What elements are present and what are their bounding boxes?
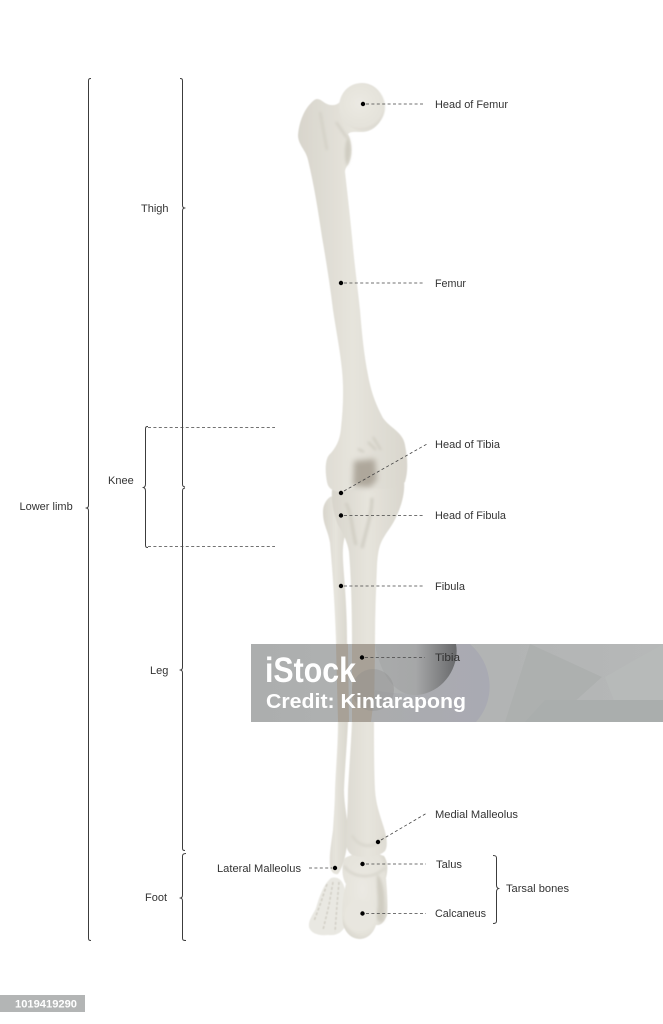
watermark shape: large purple circle bbox=[371, 644, 490, 722]
bracket: Foot bbox=[180, 854, 186, 940]
bracket: Lower limb bbox=[86, 78, 91, 940]
label: Lower limb: Lower limb bbox=[20, 501, 73, 513]
image number tag bbox=[0, 995, 85, 1012]
bone: femur bbox=[298, 83, 407, 492]
label: Leg: Leg bbox=[150, 665, 168, 677]
watermark credit: Credit: Kintarapong bbox=[266, 691, 466, 713]
callout: Talus bbox=[360, 859, 462, 871]
callout: Fibula bbox=[339, 581, 466, 593]
image number tag: 1019419290 bbox=[15, 998, 77, 1010]
callout: Tibia bbox=[360, 652, 461, 664]
watermark shape: dark circle bbox=[375, 644, 457, 695]
callout: Head of Fibula bbox=[339, 510, 507, 522]
callout: Head of Fibula: Head of Fibula bbox=[435, 510, 507, 522]
label: Knee: Knee bbox=[108, 475, 134, 487]
callout: Head of Femur bbox=[361, 99, 508, 111]
bone: talus and calcaneus bbox=[342, 853, 387, 939]
callout: Lateral Malleolus: Lateral Malleolus bbox=[217, 863, 302, 875]
watermark shape: triangles bbox=[505, 644, 602, 722]
label: Thigh: Thigh bbox=[141, 203, 169, 215]
bracket: Thigh bbox=[180, 78, 185, 487]
callout: Head of Tibia: Head of Tibia bbox=[435, 439, 501, 451]
bracket: Knee bbox=[144, 426, 275, 548]
watermark band bbox=[251, 644, 663, 722]
callout: Talus: Talus bbox=[436, 859, 462, 871]
bracket: Tarsal bones: Tarsal bones bbox=[506, 883, 569, 895]
bracket: Leg bbox=[180, 488, 185, 850]
callout: Calcaneus: Calcaneus bbox=[435, 908, 486, 920]
callout: Medial Malleolus: Medial Malleolus bbox=[435, 809, 518, 821]
callout: Lateral Malleolus bbox=[217, 863, 337, 875]
callout: Femur bbox=[339, 278, 466, 290]
label: Foot: Foot bbox=[145, 892, 167, 904]
callout: Femur: Femur bbox=[435, 278, 466, 290]
bone: tibia bbox=[332, 480, 404, 857]
callout: Fibula: Fibula bbox=[435, 581, 466, 593]
bone: fibula bbox=[323, 496, 348, 874]
knee notch shadow bbox=[353, 459, 377, 487]
callout: Head of Femur: Head of Femur bbox=[435, 99, 508, 111]
tibia and fibula seen through the watermark bbox=[336, 644, 375, 722]
bone: foot tarsals lacy bbox=[309, 878, 346, 935]
bracket: Tarsal bones bbox=[493, 856, 569, 924]
callout: Calcaneus bbox=[360, 908, 486, 920]
callout: Tibia: Tibia bbox=[435, 652, 461, 664]
watermark wordmark: iStock: iStock bbox=[265, 651, 356, 690]
illustration: leg bones bbox=[298, 83, 407, 939]
callout: Head of Tibia bbox=[339, 439, 501, 495]
callout: Medial Malleolus bbox=[376, 809, 518, 844]
